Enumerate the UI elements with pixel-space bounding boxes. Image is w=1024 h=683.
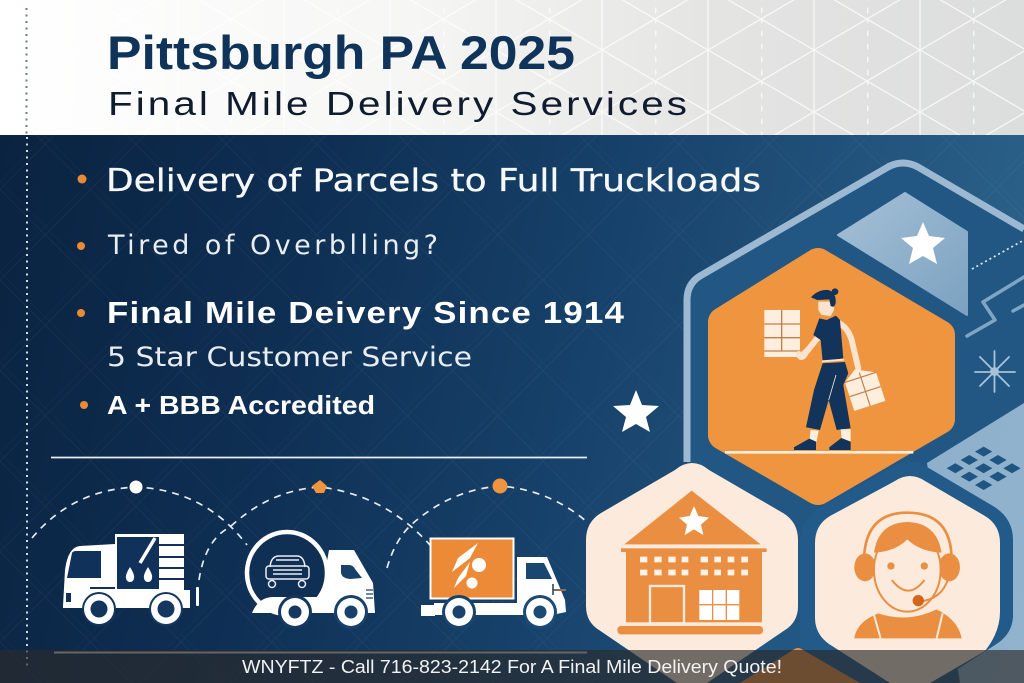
lower right panel with grid [927, 403, 1024, 683]
held box [764, 310, 800, 357]
bullet 4 text: A + BBB Accredited [107, 390, 375, 420]
peach hexagon: building [586, 463, 798, 683]
roof [624, 491, 761, 544]
rocket mark [452, 543, 486, 588]
eyes [887, 562, 928, 570]
subtitle: Final Mile Delivery Services [108, 85, 690, 122]
roof star [679, 506, 709, 535]
icon: building [617, 491, 767, 634]
kite star [901, 222, 945, 264]
ground line [725, 448, 913, 456]
smile [892, 581, 924, 591]
torso [813, 316, 843, 362]
bullet list [77, 163, 761, 420]
header band [0, 0, 1024, 135]
face [874, 528, 941, 612]
peach hexagon: support [815, 476, 1000, 683]
bullet 3 dot [77, 309, 85, 317]
carried parcel [842, 363, 885, 411]
pants [806, 362, 851, 430]
icon: truck 2 [247, 532, 375, 629]
footer bar [0, 650, 1024, 683]
star [613, 390, 659, 432]
base [617, 626, 763, 634]
route markers [130, 478, 508, 494]
marker orange circle [492, 478, 508, 494]
marker white [130, 480, 142, 494]
footer text: WNYFTZ - Call 716-823-2142 For A Final Mile Delivery Quote! [242, 657, 782, 677]
upper windows [640, 557, 748, 575]
bullet 2 text: Tired of Overblling? [107, 230, 438, 261]
headband [864, 513, 952, 560]
orange hexagon panel [723, 263, 940, 490]
head [818, 302, 834, 316]
icon: support agent [854, 513, 962, 638]
kite panel with star [838, 193, 967, 315]
lower divider line [54, 652, 587, 654]
facade [626, 552, 762, 622]
decorative dotted line [972, 240, 1024, 269]
decorative outline shape [967, 277, 1024, 336]
sub line text: 5 Star Customer Service [107, 342, 472, 373]
cornice [621, 548, 767, 552]
bullet 1 dot [78, 174, 86, 184]
outer hexagon outline [687, 163, 1024, 462]
bullet 2 dot [77, 242, 85, 250]
ear cups [854, 553, 960, 581]
marker orange pentagon [312, 480, 327, 493]
vertical dotted line [26, 8, 28, 668]
blue band behind support hexagon [800, 462, 1013, 683]
bullet 3 text: Final Mile Deivery Since 1914 [107, 295, 625, 330]
icon: sparkle [975, 351, 1015, 392]
microphone [918, 578, 948, 602]
bullet 4 dot [80, 401, 88, 409]
hair [811, 290, 836, 307]
icon: truck 1 [63, 534, 199, 626]
small orange hexagon [740, 648, 860, 683]
waistband [822, 360, 844, 361]
shoulders [854, 609, 962, 638]
large window [699, 590, 739, 620]
socks and shoes [794, 429, 851, 450]
large hexagon interior [687, 163, 1024, 683]
dashed route arcs [32, 486, 587, 580]
icon: truck 3 [421, 538, 566, 629]
arms [799, 338, 817, 357]
bullet 1 text: Delivery of Parcels to Full Truckloads [106, 163, 761, 199]
door [650, 586, 684, 623]
hair [874, 522, 942, 553]
title: Pittsburgh PA 2025 [107, 26, 575, 79]
kite shape [838, 193, 967, 315]
small car [266, 556, 309, 588]
divider line [51, 456, 587, 458]
worker illustration [725, 288, 913, 452]
